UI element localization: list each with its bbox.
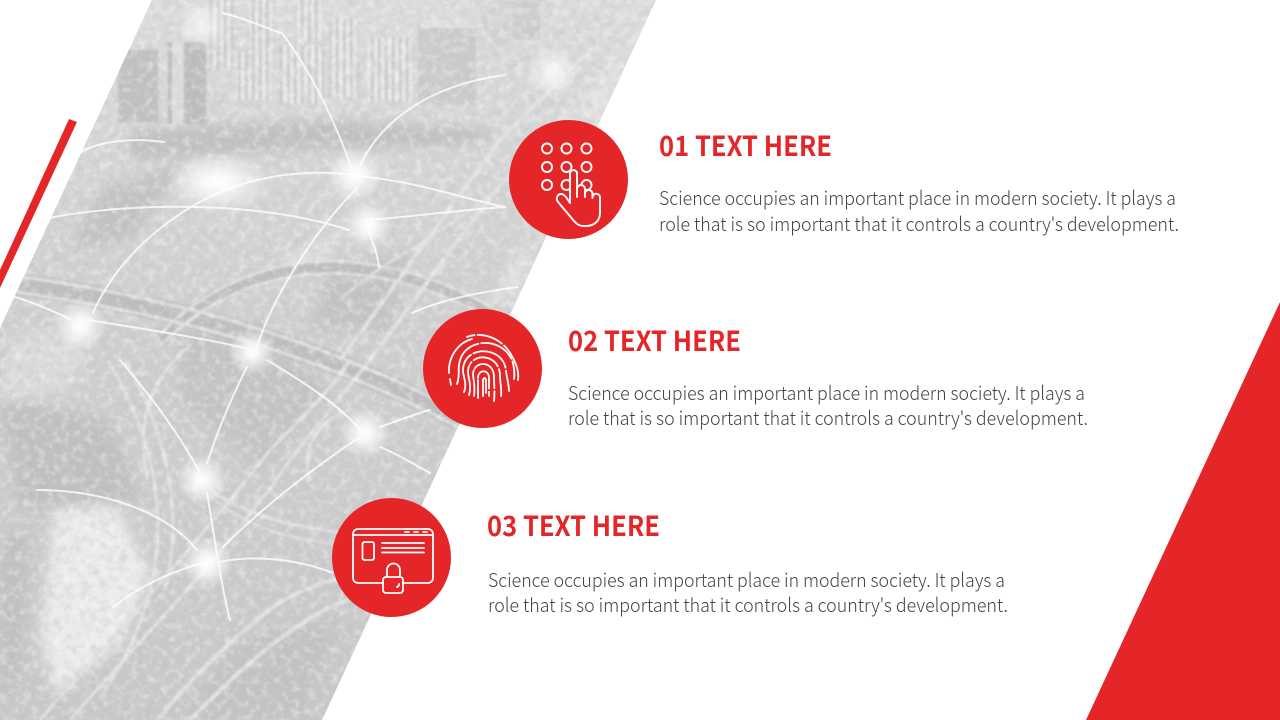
text block 03: role that is so important that it controls a country's development.: [488, 591, 1008, 618]
icon: keypad and hand: [509, 120, 628, 239]
highway bands: [0, 0, 660, 720]
item 1: [509, 120, 1179, 239]
icon: browser window with padlock: [332, 498, 451, 617]
item 2: [423, 309, 1088, 431]
network nodes: [54, 0, 579, 589]
text block 01: role that is so important that it controls a country's development.: [659, 210, 1179, 237]
heading 02: 02 TEXT HERE: [568, 320, 741, 360]
red accent line: [0, 119, 77, 288]
icon: fingerprint: [423, 309, 542, 428]
text block 02: [568, 379, 1088, 431]
soft tonal zones: [4, 76, 618, 692]
red corner triangle: [1086, 302, 1280, 720]
background photo: aerial city network: [0, 0, 660, 720]
city towers: [118, 0, 540, 124]
heading 01: 01 TEXT HERE: [659, 125, 832, 165]
noise texture: [0, 0, 660, 720]
text block 02: role that is so important that it controls a country's development.: [568, 404, 1088, 431]
text block 01: [659, 184, 1179, 237]
text block 02: Science occupies an important place in modern society. It plays a: [568, 379, 1085, 406]
text block 03: [488, 566, 1008, 618]
item 3: [332, 498, 1008, 618]
text block 01: Science occupies an important place in modern society. It plays a: [659, 184, 1176, 211]
text block 03: Science occupies an important place in modern society. It plays a: [488, 566, 1005, 593]
heading 03: 03 TEXT HERE: [487, 505, 660, 545]
network links: [0, 13, 518, 620]
